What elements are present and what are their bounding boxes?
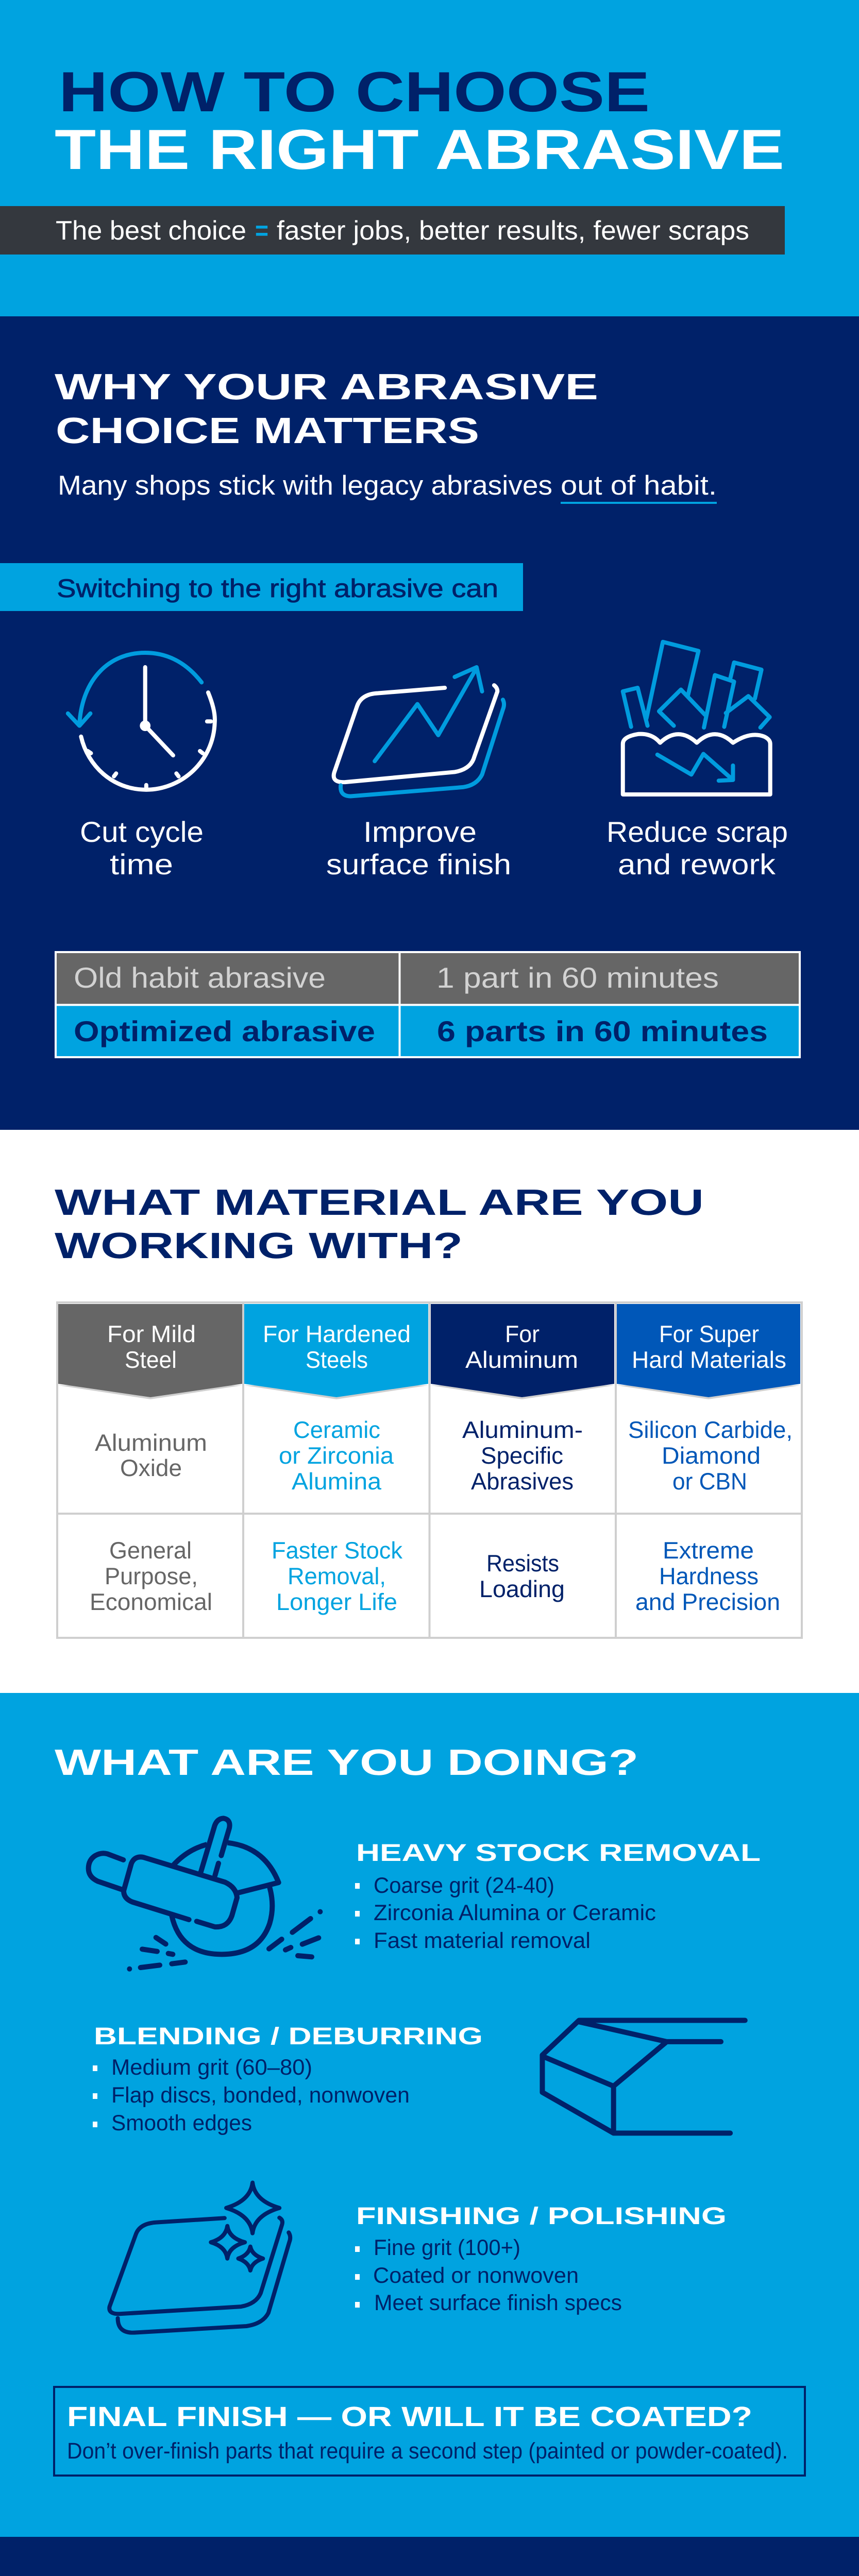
heading: WHAT MATERIAL ARE YOU: [55, 1182, 704, 1223]
column: super hard cells: Extreme: [663, 1537, 754, 1564]
block: finishing and polishing: Coated or nonwoven: [373, 2263, 579, 2288]
column: aluminum cells: [462, 1416, 583, 1602]
column: mild steel cells: Aluminum: [95, 1429, 207, 1456]
block: finishing and polishing: FINISHING / POLISHING: [356, 2202, 727, 2229]
material table grid: [57, 1302, 802, 1638]
caption: reduce scrap: and rework: [618, 848, 776, 880]
icon: clock: [68, 653, 215, 790]
column: hardened steel cells: Alumina: [292, 1468, 381, 1495]
intro text: Many shops stick with legacy abrasives: [58, 470, 552, 501]
subtitle bar: =: [255, 216, 268, 246]
column: hardened steel cells: Longer Life: [276, 1588, 397, 1615]
column: super hard cells: Diamond: [662, 1442, 761, 1469]
column: hardened steel cells: or Zirconia: [279, 1442, 394, 1469]
column: mild steel cells: General: [109, 1537, 192, 1564]
column: mild steel cells: Purpose,: [105, 1563, 198, 1589]
block: heavy stock removal: HEAVY STOCK REMOVAL: [356, 1839, 761, 1866]
heading: WHY YOUR ABRASIVE: [55, 367, 598, 408]
block: blending and deburring: Smooth edges: [111, 2111, 252, 2136]
caption: reduce scrap: [607, 816, 788, 880]
subtitle bar: faster jobs, better results, fewer scraps: [277, 216, 749, 246]
icon: chamfered edge: [542, 2021, 745, 2133]
column: super hard cells: or CBN: [672, 1468, 747, 1495]
header: aluminum: [431, 1304, 614, 1399]
header: mild steel: [58, 1304, 242, 1399]
panel: hero header: [0, 0, 859, 316]
block: heavy stock removal: Fast material removal: [374, 1928, 591, 1953]
column: hardened steel cells: Faster Stock: [272, 1537, 403, 1564]
header: hardened steels: For Hardened: [263, 1320, 411, 1347]
block: heavy stock removal: [355, 1839, 761, 1953]
title: [55, 60, 784, 181]
icon: surface finish: [334, 667, 504, 796]
callout: final finish: [54, 2387, 805, 2476]
caption: improve surface finish: Improve: [363, 816, 477, 848]
column: super hard cells: and Precision: [635, 1588, 780, 1615]
column: mild steel cells: [90, 1429, 212, 1615]
column: mild steel cells: Oxide: [120, 1454, 182, 1481]
panel: what are you doing: [0, 1693, 859, 2537]
header: aluminum: Aluminum: [465, 1346, 578, 1373]
header: hardened steels: [244, 1304, 428, 1399]
callout: final finish: Don’t over-finish parts that require a second step (painted or powder-coated).: [67, 2438, 788, 2464]
column: aluminum cells: Abrasives: [471, 1468, 574, 1495]
subtitle bar: The best choice: [56, 216, 246, 246]
header: hardened steels: Steels: [306, 1346, 368, 1373]
comparison table: Old habit abrasive: [74, 961, 326, 994]
intro text: out of habit.: [561, 470, 717, 501]
panel: what material: [0, 1130, 859, 1693]
header: super hard materials: [617, 1304, 800, 1399]
comparison table: [56, 952, 800, 1057]
block: blending and deburring: Medium grit (60–80): [111, 2055, 312, 2080]
header: mild steel: Steel: [125, 1346, 177, 1373]
title: THE RIGHT ABRASIVE: [55, 118, 784, 181]
block: heavy stock removal: Coarse grit (24-40): [374, 1873, 554, 1898]
panel: protect the part: [0, 2537, 859, 2576]
column: super hard cells: Hardness: [659, 1563, 759, 1589]
icon: angle grinder: [89, 1818, 320, 1969]
column: aluminum cells: Resists: [486, 1550, 559, 1577]
intro text: [58, 470, 717, 504]
block: finishing and polishing: Fine grit (100+): [374, 2235, 520, 2260]
header: super hard materials: Hard Materials: [632, 1346, 786, 1373]
caption: cut cycle time: time: [110, 848, 173, 880]
block: blending and deburring: Flap discs, bonded, nonwoven: [111, 2083, 410, 2108]
comparison table: 1 part in 60 minutes: [436, 961, 719, 994]
heading: CHOICE MATTERS: [56, 411, 479, 451]
column: aluminum cells: Specific: [481, 1442, 563, 1469]
block: finishing and polishing: Meet surface finish specs: [374, 2291, 622, 2315]
heading: [55, 367, 598, 451]
banner: switching: Switching to the right abrasive can: [57, 574, 498, 603]
column: aluminum cells: Loading: [479, 1575, 565, 1602]
caption: reduce scrap: Reduce scrap: [607, 816, 788, 848]
heading: WORKING WITH?: [55, 1226, 463, 1266]
header: mild steel: For Mild: [107, 1320, 196, 1347]
title: HOW TO CHOOSE: [59, 60, 650, 124]
icon: polished surface with sparkles: [109, 2183, 290, 2333]
heading: [55, 1182, 704, 1266]
column: super hard cells: Silicon Carbide,: [628, 1416, 793, 1443]
heading: WHAT ARE YOU DOING?: [55, 1742, 638, 1783]
column: super hard cells: [628, 1416, 793, 1615]
caption: improve surface finish: surface finish: [326, 848, 511, 880]
icon: scrap and rework: [623, 642, 770, 794]
column: hardened steel cells: [272, 1416, 403, 1615]
column: aluminum cells: Aluminum-: [462, 1416, 583, 1443]
banner: switching: [0, 563, 523, 611]
panel: why your abrasive choice matters: [0, 316, 859, 1130]
comparison table: 6 parts in 60 minutes: [437, 1015, 768, 1047]
column: mild steel cells: Economical: [90, 1588, 212, 1615]
column: hardened steel cells: Removal,: [288, 1563, 386, 1589]
callout: final finish: FINAL FINISH — OR WILL IT BE COATED?: [67, 2401, 752, 2432]
subtitle bar: [0, 206, 785, 255]
caption: cut cycle time: [80, 816, 204, 880]
block: finishing and polishing: [355, 2202, 727, 2315]
column: hardened steel cells: Ceramic: [293, 1416, 380, 1443]
block: blending and deburring: [93, 2022, 483, 2136]
caption: improve surface finish: [326, 816, 511, 880]
block: blending and deburring: BLENDING / DEBURRING: [94, 2022, 483, 2049]
block: heavy stock removal: Zirconia Alumina or Ceramic: [374, 1901, 656, 1925]
header: super hard materials: For Super: [659, 1320, 759, 1347]
caption: cut cycle time: Cut cycle: [80, 816, 204, 848]
header: aluminum: For: [505, 1320, 540, 1347]
comparison table: Optimized abrasive: [74, 1015, 375, 1047]
